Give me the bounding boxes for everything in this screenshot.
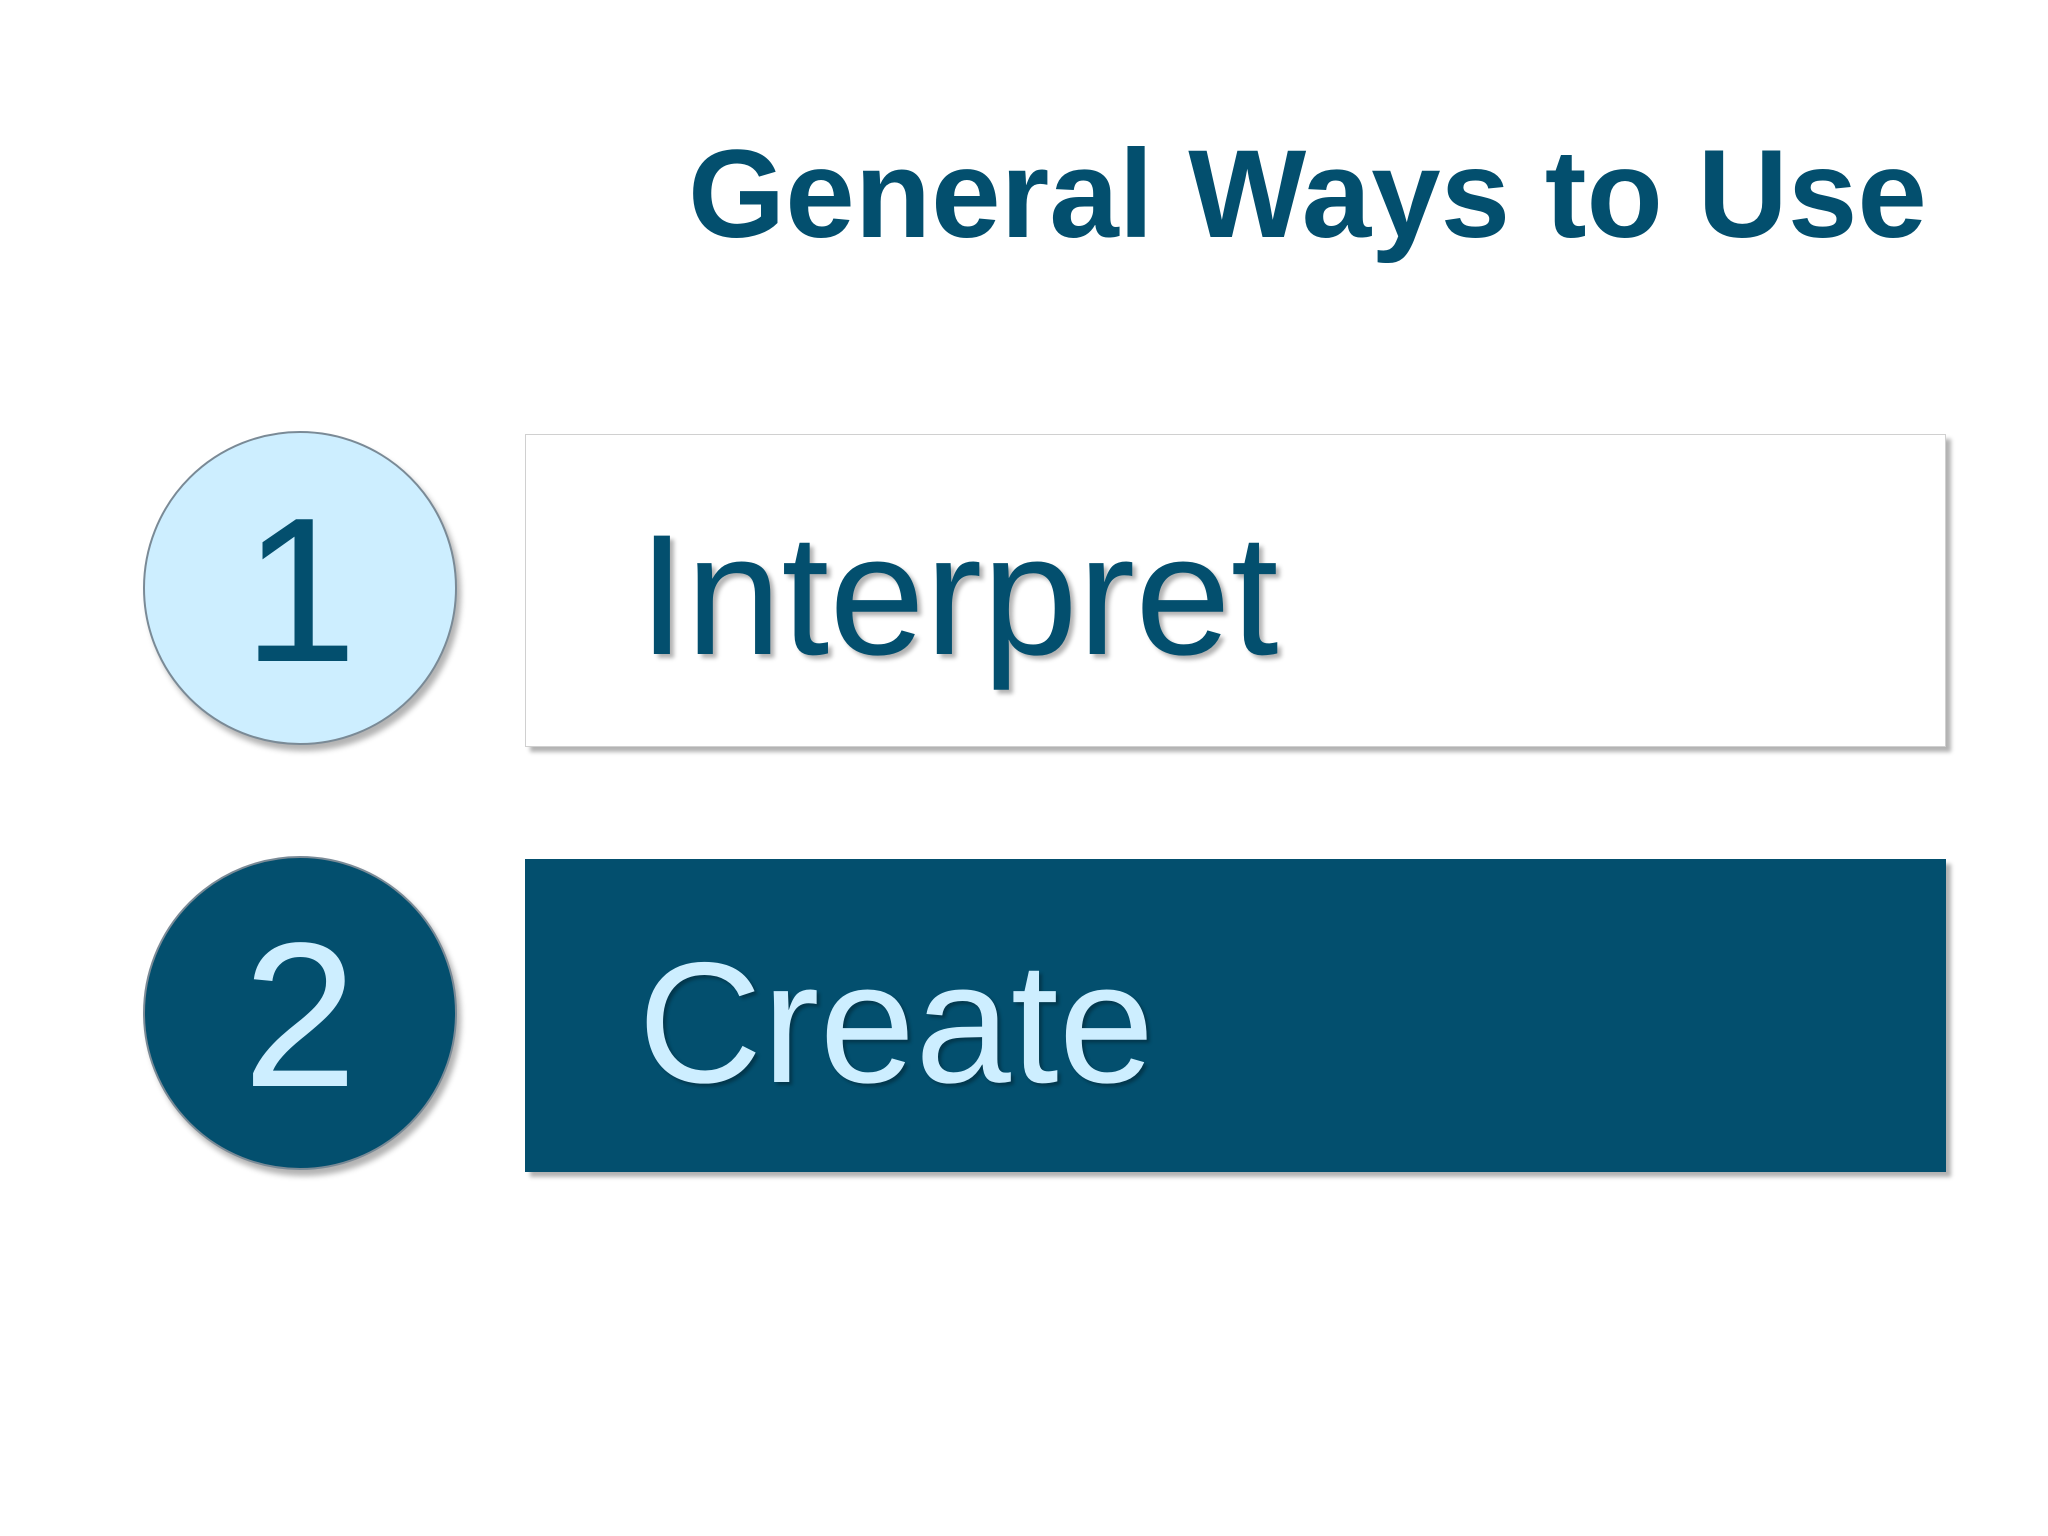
circle 1: 1 xyxy=(243,475,357,705)
label: interpret: Interpret xyxy=(638,499,1279,691)
title: General Ways to Use xyxy=(688,125,1927,264)
label: create: Create xyxy=(638,927,1154,1119)
circle 1 xyxy=(143,431,457,745)
circle 2: 2 xyxy=(243,900,357,1130)
box: interpret xyxy=(525,434,1946,747)
circle 2 xyxy=(143,856,457,1170)
box: create xyxy=(525,859,1946,1172)
